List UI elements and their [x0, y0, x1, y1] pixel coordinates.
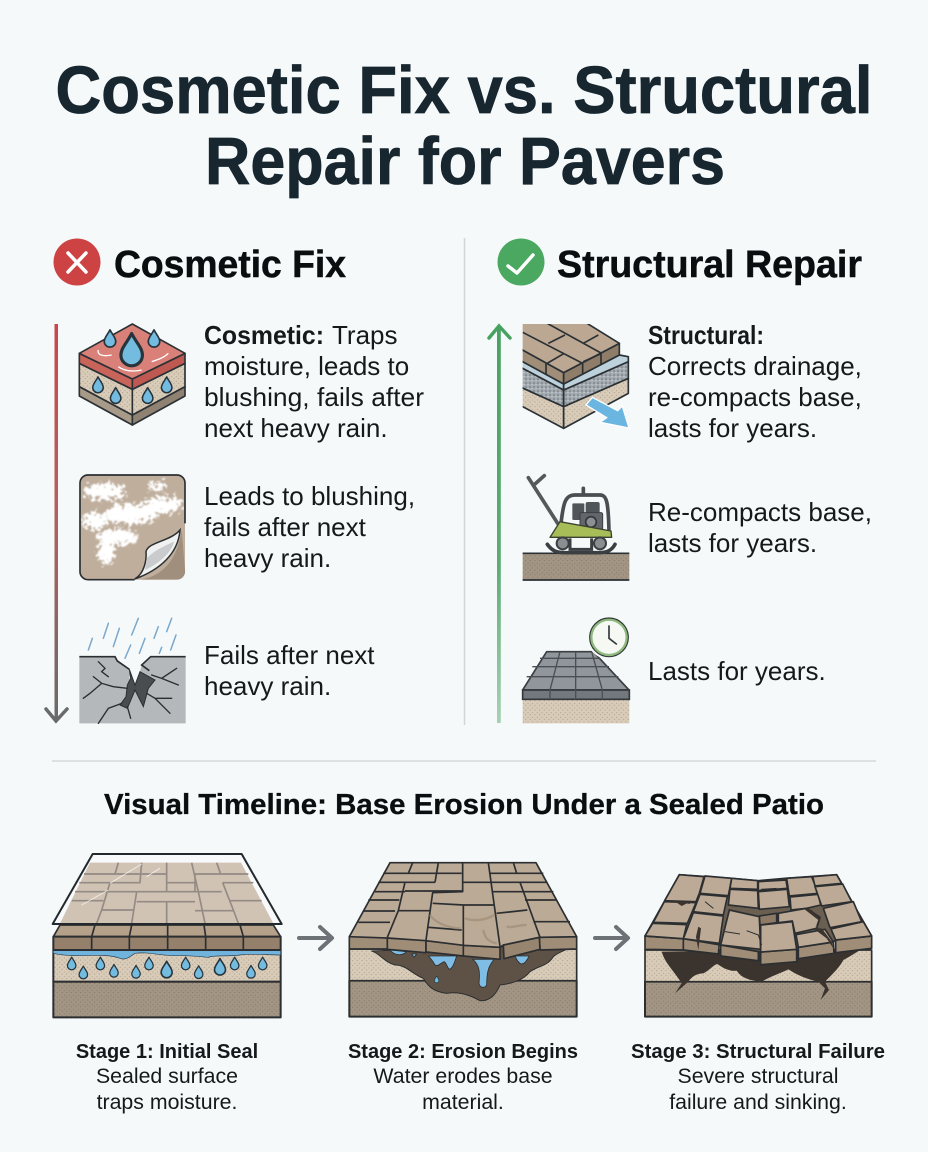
heading: cosmetic fix: Cosmetic Fix: [114, 244, 346, 286]
arrow: upward improvement: [489, 326, 510, 723]
text: structural corrects drainage: re-compacts base,: [648, 382, 862, 412]
icon: moisture trapped under sealed block: [79, 324, 185, 425]
stage 3 caption: [631, 1041, 885, 1114]
stage 3 caption: Stage 3: Structural Failure: [631, 1041, 885, 1063]
text: re-compacts base: Re-compacts base,: [648, 497, 872, 527]
text: fails after next heavy rain: heavy rain.: [204, 671, 331, 701]
stage 3 illustration: structural failure: [645, 875, 872, 1017]
panel: cosmetic fix: [46, 238, 424, 723]
stage 2 caption: [348, 1041, 578, 1114]
text: cosmetic traps moisture: blushing, fails after: [204, 382, 424, 412]
icon: plate compactor on base: [523, 476, 629, 580]
stage 1 caption: traps moisture.: [97, 1090, 237, 1114]
stage 1 caption: Stage 1: Initial Seal: [76, 1041, 258, 1063]
text: re-compacts base: [648, 497, 872, 558]
stage 2 illustration: erosion begins: [349, 863, 577, 1017]
stage 2 caption: material.: [422, 1090, 504, 1114]
stage 1 illustration: sealed patio: [53, 854, 282, 1017]
text: cosmetic traps moisture: moisture, leads to: [204, 351, 409, 381]
icon: red X: [54, 238, 100, 286]
text: re-compacts base: lasts for years.: [648, 528, 817, 558]
text: leads to blushing: fails after next: [204, 512, 367, 542]
text: leads to blushing: Leads to blushing,: [204, 481, 415, 511]
text: structural corrects drainage: [648, 320, 862, 443]
heading: visual timeline: Visual Timeline: Base Erosion Under a Sealed Patio: [104, 789, 824, 821]
icon: layered base with drainage arrow: [518, 320, 629, 428]
arrow: downward decline: [46, 324, 67, 721]
text: structural corrects drainage: Corrects drainage,: [648, 351, 862, 381]
stage 2 caption: Stage 2: Erosion Begins: [348, 1041, 578, 1063]
title: Cosmetic Fix vs. Structural: [56, 53, 872, 128]
icon: cracked slab under rain: [79, 618, 186, 723]
panel: visual timeline: [53, 789, 885, 1114]
icon: blushed paver with peeling corner: [80, 475, 185, 580]
text: leads to blushing: heavy rain.: [204, 543, 331, 573]
text: fails after next heavy rain: [204, 640, 375, 701]
text: lasts for years: Lasts for years.: [648, 656, 826, 686]
icon: finished pavers with clock: [523, 615, 631, 723]
title: Repair for Pavers: [205, 124, 725, 199]
text: cosmetic traps moisture: Traps: [332, 320, 398, 350]
panel: structural repair: [489, 238, 872, 723]
icon: green check: [498, 238, 544, 286]
stage 3 caption: Severe structural: [678, 1064, 838, 1088]
text: cosmetic traps moisture: next heavy rain.: [204, 413, 388, 443]
stage 2 caption: Water erodes base: [373, 1064, 553, 1088]
arrow: stage 1 to stage 2: [299, 927, 332, 949]
stage 3 caption: failure and sinking.: [669, 1090, 847, 1114]
text: leads to blushing: [204, 481, 415, 573]
text: cosmetic traps moisture: Cosmetic:: [204, 320, 324, 350]
text: cosmetic traps moisture: [204, 320, 424, 443]
arrow: stage 2 to stage 3: [595, 927, 628, 949]
text: fails after next heavy rain: Fails after next: [204, 640, 375, 670]
stage 1 caption: [76, 1041, 258, 1114]
text: structural corrects drainage: lasts for years.: [648, 413, 817, 443]
title: [56, 53, 872, 199]
stage 1 caption: Sealed surface: [96, 1064, 238, 1088]
heading: structural repair: Structural Repair: [557, 244, 862, 286]
text: structural corrects drainage: Structural:: [648, 320, 764, 350]
